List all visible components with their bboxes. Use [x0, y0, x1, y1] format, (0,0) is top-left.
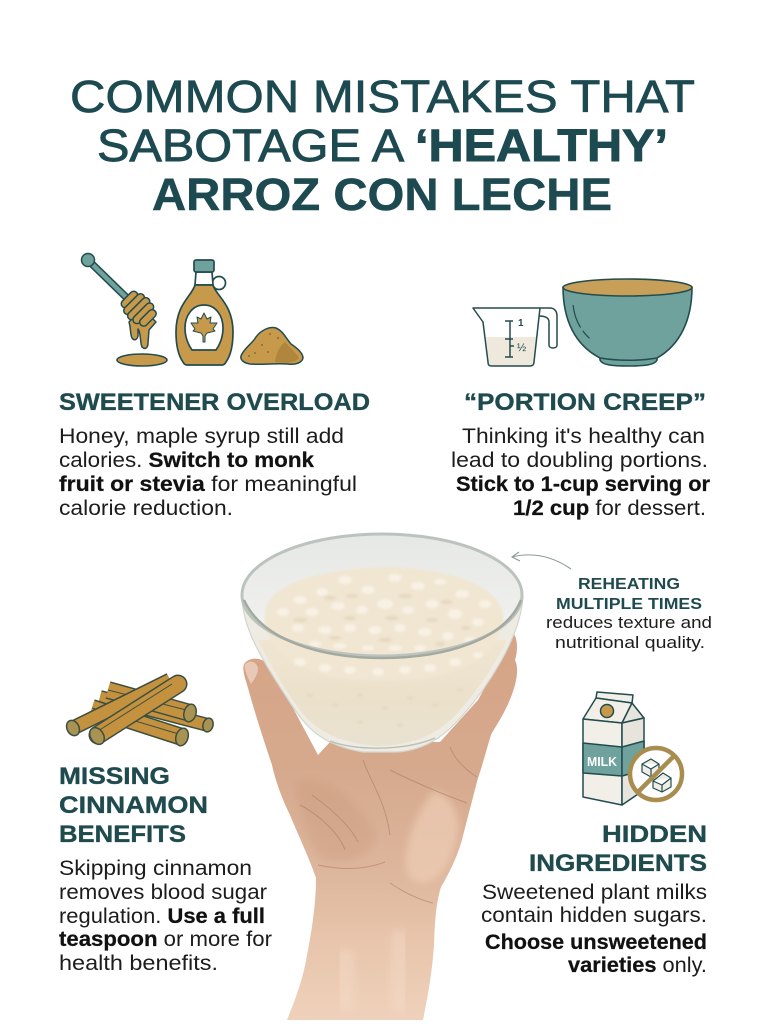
icon: honey dipper — [82, 254, 167, 366]
callout: reheating multiple times: nutritional quality. — [555, 634, 705, 652]
heading: missing cinnamon benefits: MISSING — [59, 763, 170, 790]
icon: milk carton with no sugar sign — [583, 692, 682, 805]
panel: hidden ingredients — [481, 692, 707, 977]
text: cinnamon body: teaspoon or more for — [59, 928, 272, 951]
title: COMMON MISTAKES THAT — [70, 71, 695, 122]
text: portion body: lead to doubling portions. — [451, 449, 708, 472]
callout: reheating multiple times — [546, 576, 712, 652]
text: cinnamon body: Skipping cinnamon — [59, 857, 252, 880]
text: cinnamon body: regulation. Use a full — [59, 905, 265, 928]
text: portion body — [451, 425, 710, 520]
panel: missing cinnamon benefits — [59, 680, 272, 975]
photo: hand holding glass bowl of rice pudding — [242, 534, 523, 1020]
icon: milk carton with no sugar sign: MILK — [587, 754, 618, 769]
panel: portion creep — [451, 279, 710, 520]
heading: portion creep: “PORTION CREEP” — [464, 389, 706, 416]
text: sweetener body: Honey, maple syrup still add — [59, 425, 344, 448]
icon: brown sugar pile — [241, 327, 303, 364]
heading: missing cinnamon benefits — [59, 763, 208, 848]
text: hidden ingredients body: Choose unsweetened — [485, 931, 707, 954]
icon: measuring cup: ½ — [517, 342, 526, 354]
callout: reheating multiple times: reduces texture and — [546, 614, 712, 632]
heading: hidden ingredients: INGREDIENTS — [529, 850, 707, 877]
callout: reheating multiple times: REHEATING — [578, 576, 680, 593]
icon: maple syrup bottle — [176, 260, 233, 365]
text: portion body: 1/2 cup for dessert. — [513, 497, 706, 520]
hand — [243, 632, 517, 1020]
panel: sweetener overload — [59, 254, 370, 520]
heading: missing cinnamon benefits: BENEFITS — [59, 821, 186, 848]
text: hidden ingredients body: contain hidden sugars. — [481, 904, 707, 927]
text: sweetener body: calories. Switch to monk — [59, 449, 314, 472]
rice grains — [277, 574, 491, 676]
glass bowl — [242, 534, 523, 752]
heading: missing cinnamon benefits: CINNAMON — [59, 792, 208, 819]
text: sweetener body — [59, 425, 357, 520]
heading: sweetener overload: SWEETENER OVERLOAD — [59, 389, 370, 416]
icon: large teal bowl — [563, 279, 692, 366]
text: cinnamon body — [59, 857, 272, 975]
text: sweetener body: fruit or stevia for meaningful — [59, 473, 357, 496]
text: cinnamon body: health benefits. — [59, 952, 218, 975]
text: portion body: Stick to 1-cup serving or — [456, 473, 710, 496]
heading: hidden ingredients — [529, 821, 707, 877]
text: hidden ingredients body: varieties only. — [568, 954, 707, 977]
heading: hidden ingredients: HIDDEN — [602, 821, 707, 848]
text: hidden ingredients body: Sweetened plant milks — [482, 881, 707, 904]
text: hidden ingredients body — [481, 881, 707, 977]
callout: reheating multiple times: MULTIPLE TIMES — [556, 596, 702, 613]
title — [70, 71, 695, 220]
title: SABOTAGE A ‘HEALTHY’ — [97, 120, 668, 171]
text: sweetener body: calorie reduction. — [59, 497, 233, 520]
icon: measuring cup: 1 — [518, 318, 524, 329]
text: cinnamon body: removes blood sugar — [59, 881, 267, 904]
arrow: callout pointer to bowl — [512, 552, 571, 569]
icon: cinnamon sticks — [64, 680, 215, 747]
text: portion body: Thinking it's healthy can — [462, 425, 705, 448]
title: ARROZ CON LECHE — [152, 169, 612, 220]
icon: measuring cup — [473, 308, 557, 366]
